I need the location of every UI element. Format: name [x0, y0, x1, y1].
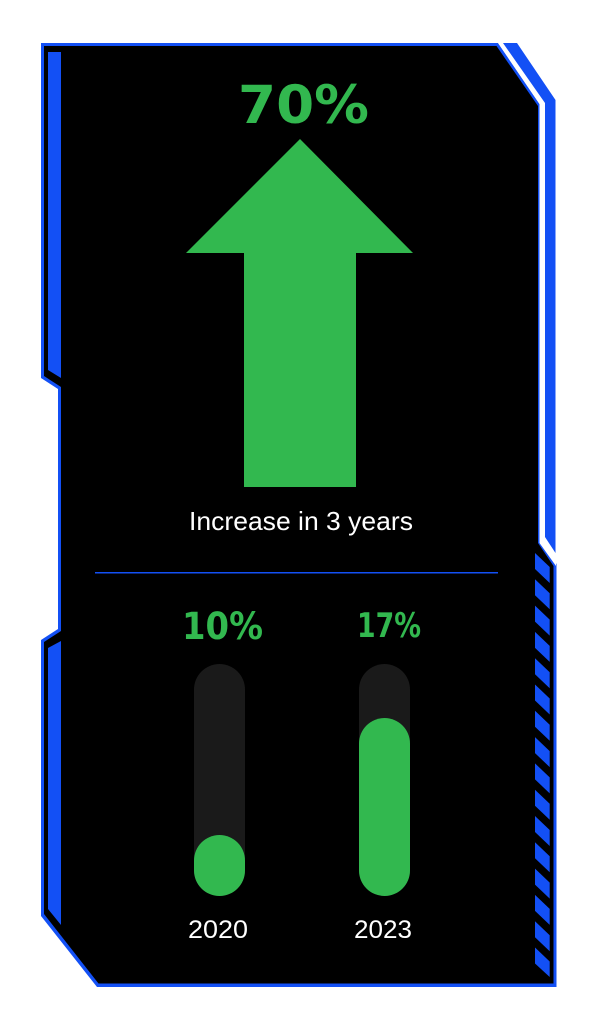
bar fill 2023	[359, 718, 410, 896]
caption: increase in 3 years: Increase in 3 years	[189, 506, 413, 536]
divider line	[95, 572, 498, 574]
year label 2020: 2020	[188, 916, 248, 944]
value: 10%: 10%	[182, 605, 263, 648]
value: 17%: 17%	[357, 606, 421, 646]
icon: up arrow	[186, 139, 413, 487]
headline figure: 70%: 70%	[238, 75, 369, 136]
column: 2020	[182, 605, 263, 944]
bar track 2023	[359, 664, 410, 896]
year label 2023: 2023	[354, 916, 412, 944]
bar fill 2020	[194, 835, 245, 896]
column: 2023	[354, 606, 421, 944]
panel: sci-fi frame	[41, 43, 556, 987]
bar track 2020	[194, 664, 245, 896]
